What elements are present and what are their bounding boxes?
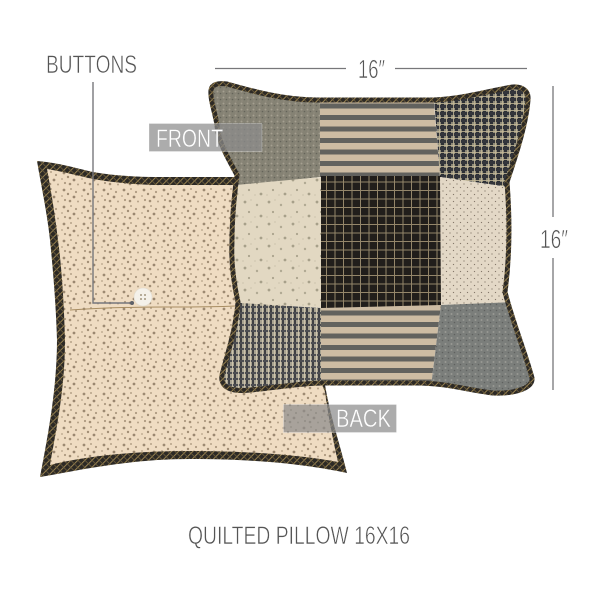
- front pillow: [205, 80, 540, 395]
- label: back: [284, 404, 396, 433]
- callout line: buttons: [93, 82, 134, 305]
- patch: top centre: [320, 102, 440, 177]
- patch: bottom centre: [321, 305, 441, 382]
- patch: middle right: [440, 177, 506, 305]
- label: buttons: BUTTONS: [46, 51, 137, 79]
- back flap seam: [70, 306, 235, 310]
- label: front: FRONT: [156, 125, 223, 153]
- patch: middle left: [234, 177, 321, 308]
- back pillow: [37, 161, 347, 477]
- dimension: height 16 inches: 16″: [540, 224, 568, 254]
- patch: centre: [321, 176, 441, 308]
- patch: top left: [213, 86, 320, 185]
- patch: bottom left: [224, 303, 321, 388]
- icon: button: [134, 288, 152, 306]
- caption: QUILTED PILLOW 16X16: [188, 522, 410, 550]
- label: back: BACK: [336, 405, 391, 433]
- patch: top right: [434, 89, 526, 186]
- patch: bottom right: [432, 302, 530, 391]
- dimension: width 16 inches: 16″: [358, 54, 385, 84]
